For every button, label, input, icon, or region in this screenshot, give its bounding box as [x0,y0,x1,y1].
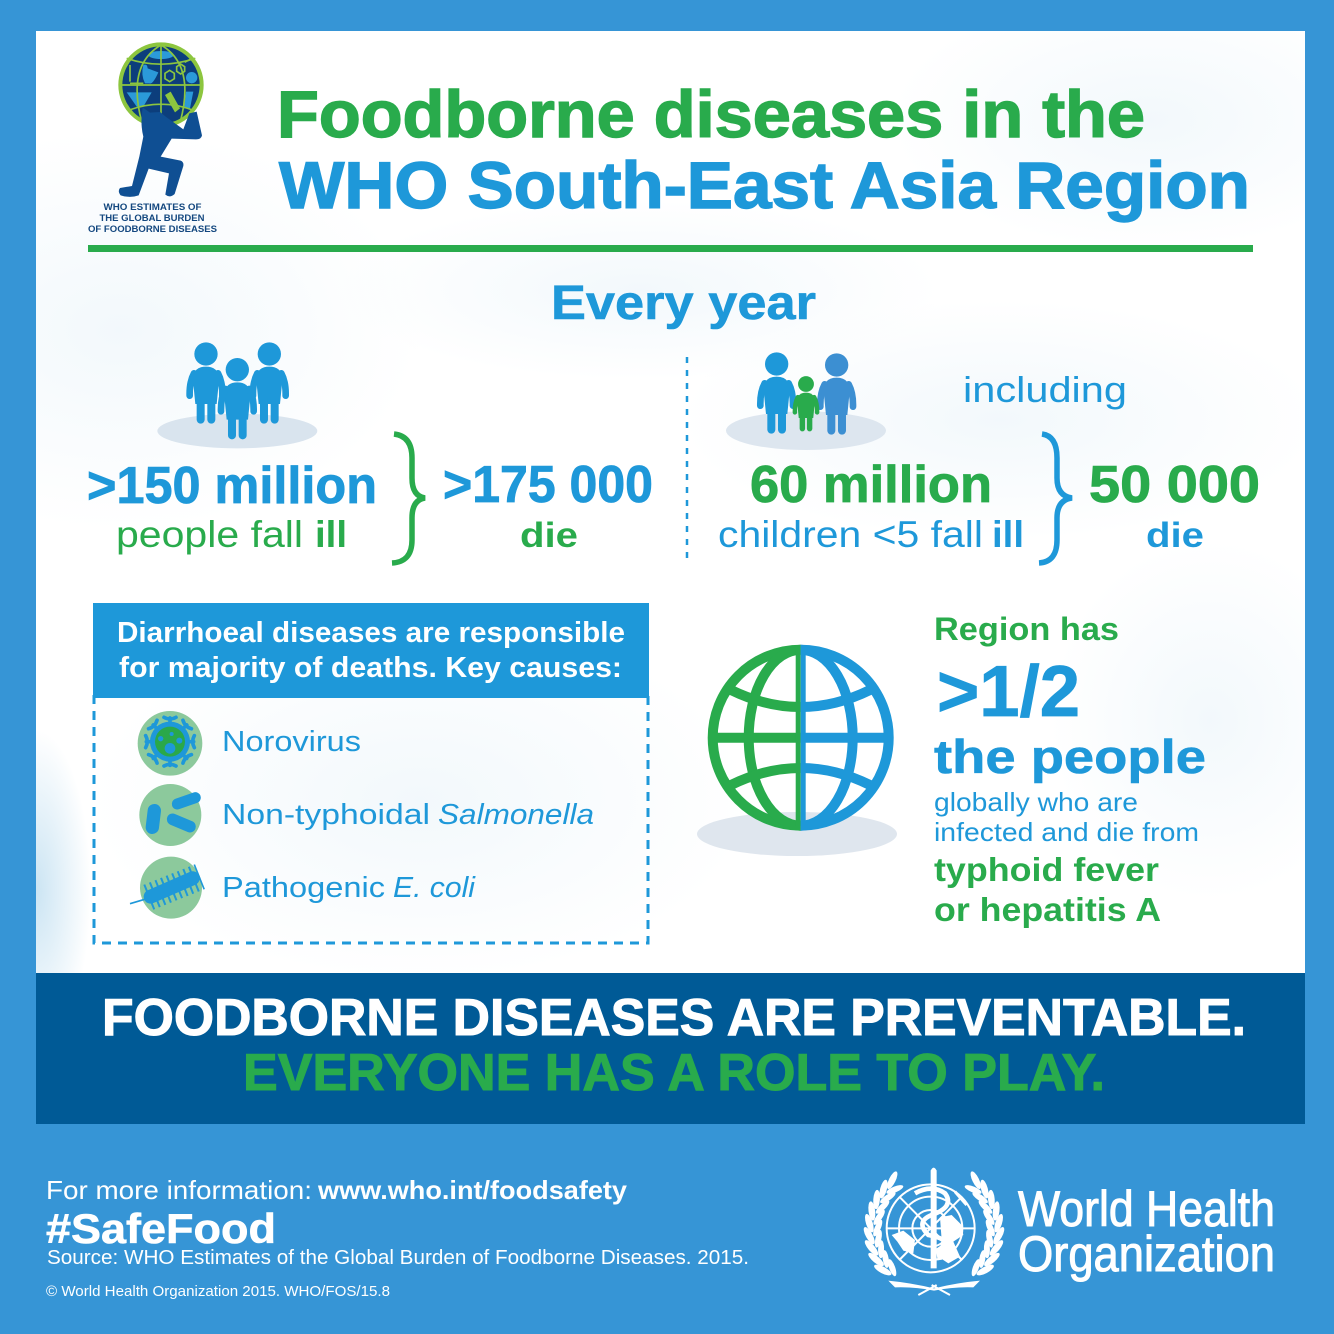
dark call-to-action band [36,973,1305,1124]
label: e. coli: E. coli [393,872,477,904]
source: Source: WHO Estimates of the Global Burden of Foodborne Diseases. 2015. [47,1247,749,1269]
label: e. coli: Pathogenic [222,872,385,904]
white content panel [36,31,1305,973]
WHO wordmark: World Health [1018,1181,1275,1237]
blue brace [1039,434,1072,563]
label: salmonella [222,799,594,831]
text block: region share [934,611,1206,928]
text block: region share: infected and die from [934,817,1199,847]
stat: total deaths [443,456,653,555]
logo figure [119,107,202,197]
title: WHO South-East Asia Region [279,148,1250,222]
stat: child deaths: 50 000 [1089,456,1260,514]
title: Foodborne diseases in the [277,77,1145,151]
stat: child deaths: die [1146,516,1204,555]
footer: more information: www.who.int/foodsafety [317,1175,628,1205]
WHO wordmark: Organization [1018,1226,1275,1282]
stat: child deaths [1089,456,1260,555]
title rule [88,245,1253,252]
heading: every year: Every year [551,277,816,330]
label: salmonella: Salmonella [438,799,594,831]
stat: people fall ill: >150 million [87,457,377,515]
footer: more information [46,1175,628,1205]
hashtag: #SafeFood [46,1205,276,1252]
panel heading text: for majority of deaths. Key causes: [119,652,622,684]
text block: region share: Region has [934,611,1119,647]
panel heading text: Diarrhoeal diseases are responsible [117,617,625,649]
panel: diarrhoeal disease causes [93,603,649,943]
WHO wordmark [1018,1181,1275,1282]
icon: family with child [726,352,886,450]
text block: region share: globally who are [934,787,1138,817]
copyright: © World Health Organization 2015. WHO/FOS/15.8 [46,1283,390,1300]
icon: norovirus [138,711,202,776]
text block: region share: or hepatitis A [934,891,1161,928]
call to action text: FOODBORNE DISEASES ARE PREVENTABLE. [102,989,1246,1047]
stat: people fall ill [87,457,377,555]
panel outline [94,690,648,943]
icon: globe [697,650,897,856]
stat: total deaths: >175 000 [443,456,653,514]
logo caption: THE GLOBAL BURDEN [100,213,205,224]
stat: children fall ill: children <5 fall [718,514,983,555]
title [277,77,1250,222]
logo caption: WHO ESTIMATES OF [104,202,202,213]
text block: region share: >1/2 [937,652,1080,732]
stat: total deaths: die [520,516,578,555]
panel heading text [117,617,625,684]
stat: children fall ill: 60 million [750,456,992,514]
stat: people fall ill: ill [315,514,347,555]
logo caption [88,202,217,235]
stat: children fall ill [718,456,1024,555]
logo globe [120,44,202,126]
icon: WHO emblem [862,1168,1006,1295]
label: salmonella: Non-typhoidal [222,799,430,831]
stat: children fall ill: ill [992,514,1024,555]
stat: people fall ill: people fall [116,514,303,555]
divider [686,357,688,560]
panel header [93,603,649,698]
icon: e. coli [130,857,202,919]
green brace [392,434,425,563]
logo caption: OF FOODBORNE DISEASES [88,224,217,235]
text block: region share: typhoid fever [934,851,1159,888]
text block: region share: the people [934,730,1206,783]
call to action text [102,989,1246,1102]
icon: global burden of foodborne diseases logo [119,44,202,197]
footer: more information: For more information: [46,1175,312,1205]
label: including: including [963,369,1127,410]
icon: salmonella [139,784,201,846]
call to action text: EVERYONE HAS A ROLE TO PLAY. [243,1044,1105,1102]
label: e. coli [222,872,477,904]
label: norovirus: Norovirus [222,726,361,758]
icon: group of people [157,342,317,448]
